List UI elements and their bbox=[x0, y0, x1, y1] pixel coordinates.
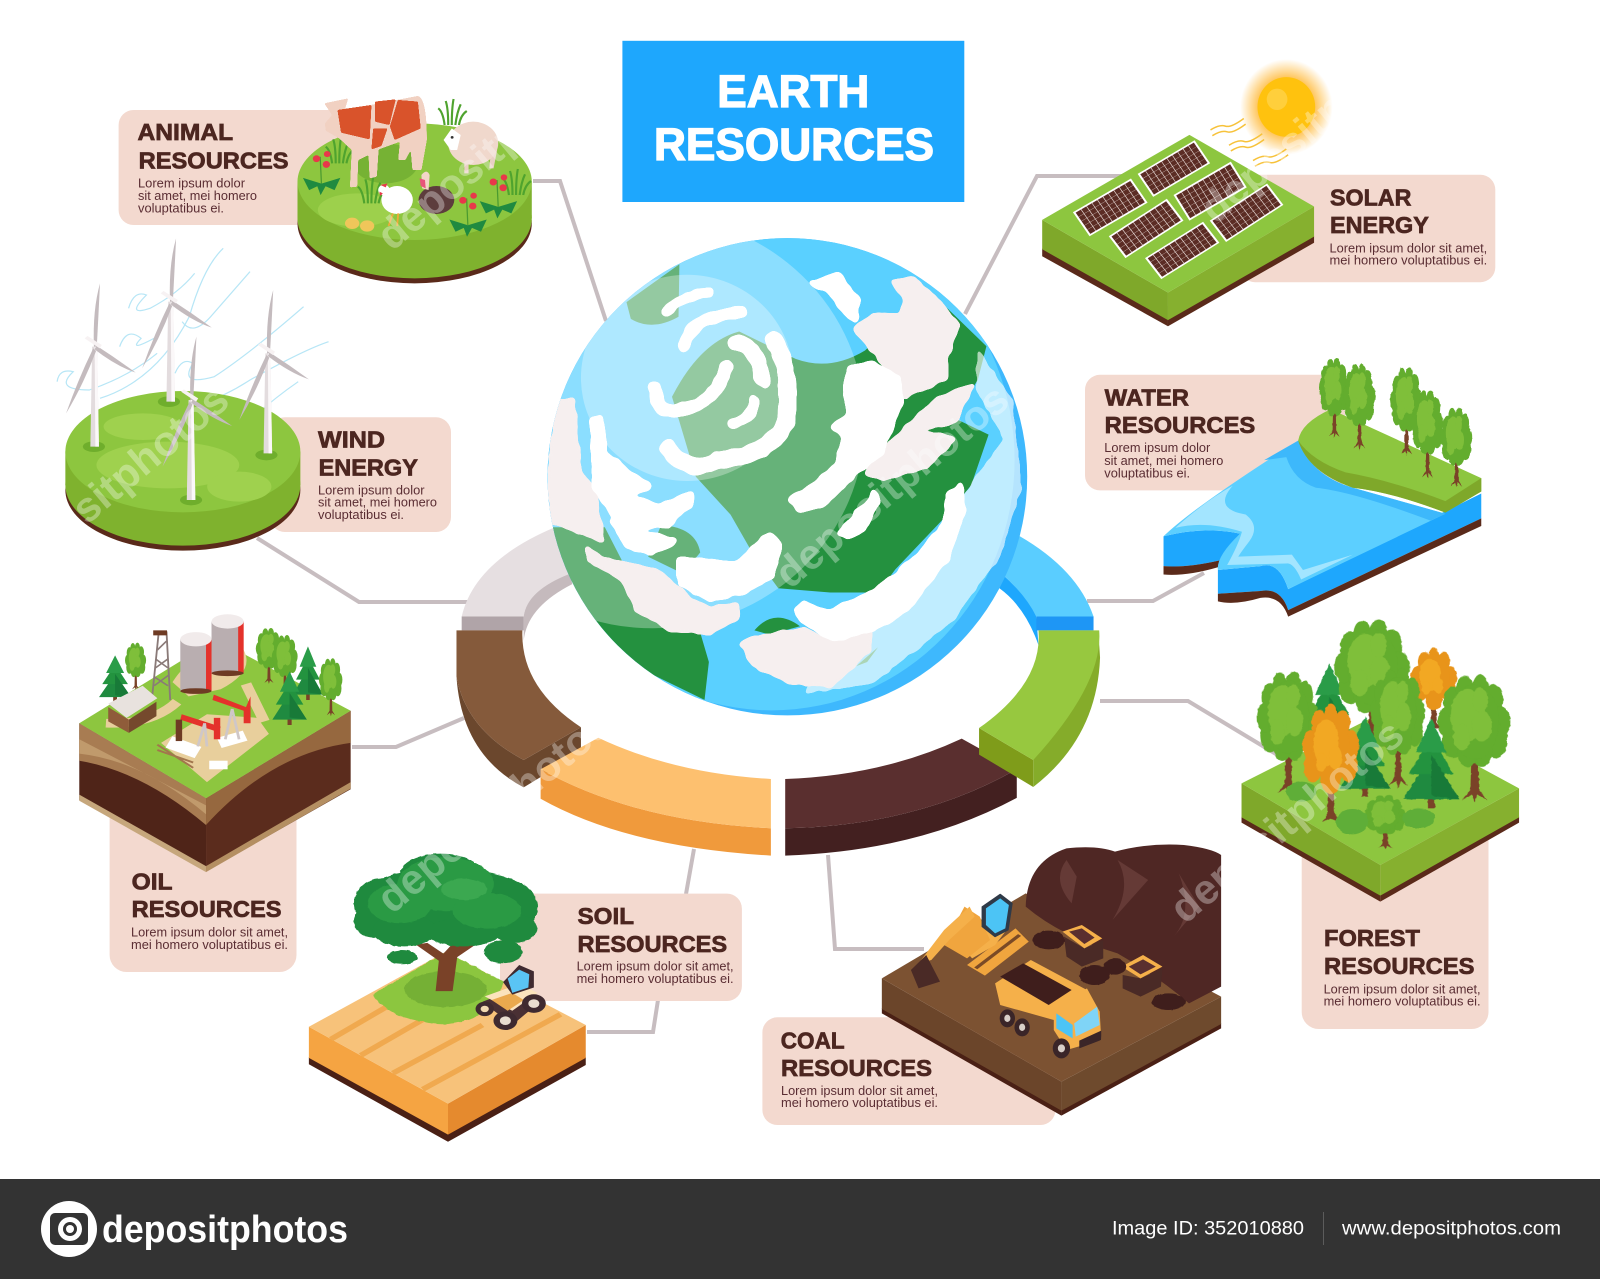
panel: solar energy: ENERGY bbox=[1330, 212, 1429, 238]
panel: wind energy: sit amet, mei homero bbox=[318, 496, 437, 510]
ring segment: oil brown bbox=[456, 630, 581, 787]
illustration: soil field bbox=[309, 854, 586, 1142]
panel: soil resources: mei homero voluptatibus ei. bbox=[577, 972, 734, 986]
panel: water resources: WATER bbox=[1105, 384, 1189, 410]
panel: wind energy: WIND bbox=[318, 426, 385, 452]
sun rays bbox=[1210, 118, 1288, 166]
icon: flowers bbox=[303, 151, 517, 237]
icon: turkey bbox=[419, 172, 454, 214]
panel: coal resources: Lorem ipsum dolor sit amet, bbox=[781, 1084, 938, 1098]
panel: forest resources: Lorem ipsum dolor sit amet, bbox=[1324, 982, 1481, 996]
panel: coal resources bbox=[762, 1017, 1055, 1125]
panel: solar energy bbox=[1240, 175, 1495, 282]
clouds: off-white bbox=[551, 280, 971, 685]
icon: excavator bbox=[911, 894, 1029, 988]
panel: water resources: voluptatibus ei. bbox=[1104, 466, 1190, 480]
ring segment: coal dark brown bbox=[785, 739, 1017, 856]
illustration: oil field bbox=[79, 614, 351, 872]
icon: house bbox=[108, 686, 157, 733]
ring segment: soil orange bbox=[541, 738, 771, 856]
illustration: water bbox=[1164, 358, 1481, 617]
icon: dump truck bbox=[995, 960, 1101, 1058]
panel: forest resources: RESOURCES bbox=[1324, 953, 1474, 979]
panel: water resources: Lorem ipsum dolor bbox=[1104, 441, 1210, 455]
watermarks: depositphotos bbox=[1191, 10, 1442, 232]
icon: trees bbox=[1319, 358, 1472, 488]
panel: wind energy: Lorem ipsum dolor bbox=[318, 483, 424, 497]
solar panels bbox=[1073, 140, 1283, 279]
illustration: forest bbox=[1242, 619, 1519, 902]
watermarks: depositphotos bbox=[766, 375, 1017, 597]
illustration: solar farm bbox=[1042, 59, 1333, 326]
watermarks bbox=[0, 10, 1442, 932]
icon: cow bbox=[324, 96, 427, 187]
icon: hen bbox=[378, 183, 413, 226]
watermarks: depositphotos bbox=[368, 37, 619, 259]
image id: Image ID: 352010880 bbox=[1112, 1218, 1304, 1240]
logo wordmark: depositphotos bbox=[102, 1209, 348, 1251]
panel: wind energy: ENERGY bbox=[319, 454, 418, 480]
panel: solar energy: SOLAR bbox=[1330, 185, 1412, 211]
continents bbox=[544, 264, 989, 700]
icon: bushes bbox=[1286, 782, 1435, 834]
panel: oil resources: Lorem ipsum dolor sit amet, bbox=[131, 925, 288, 939]
coal mountain bbox=[1026, 845, 1221, 1003]
panel: soil resources: RESOURCES bbox=[578, 931, 727, 957]
icon: wind turbine 4 bbox=[239, 290, 309, 453]
icon: chicks bbox=[345, 218, 374, 232]
ring segment: wind grey bbox=[462, 527, 572, 641]
panel: soil resources bbox=[500, 894, 742, 1001]
panel: forest resources: mei homero voluptatibus ei. bbox=[1324, 995, 1481, 1009]
icon: sun bbox=[1240, 59, 1333, 155]
sand paths bbox=[106, 649, 269, 782]
resource ring bbox=[456, 527, 1100, 856]
title box bbox=[622, 41, 964, 202]
panel: soil resources: Lorem ipsum dolor sit amet, bbox=[577, 960, 734, 974]
panel: forest resources: FOREST bbox=[1324, 925, 1420, 951]
panel: animal resources: RESOURCES bbox=[139, 147, 289, 173]
panel: oil resources: OIL bbox=[132, 868, 173, 894]
icon: wind turbine 2 bbox=[142, 238, 212, 402]
panel: oil resources: mei homero voluptatibus ei. bbox=[131, 938, 288, 952]
panel: coal resources: COAL bbox=[781, 1027, 845, 1053]
ring segment: water blue bbox=[999, 536, 1094, 645]
panel: animal resources: Lorem ipsum dolor bbox=[138, 176, 245, 190]
icon: tractor bbox=[476, 965, 546, 1030]
watermarks: depositphotos bbox=[1161, 710, 1412, 932]
globe bbox=[548, 238, 1028, 716]
icon: oil pumps bbox=[166, 695, 251, 769]
panel: coal resources: mei homero voluptatibus ei. bbox=[781, 1096, 938, 1110]
icon: coal carts bbox=[1062, 925, 1162, 997]
panel: animal resources: ANIMAL bbox=[138, 119, 233, 145]
panel: animal resources: voluptatibus ei. bbox=[138, 201, 224, 215]
illustration: coal mine bbox=[882, 845, 1221, 1116]
icon: fence bbox=[157, 745, 193, 768]
pale right cloud band bbox=[804, 348, 1021, 694]
footer bar bbox=[0, 1179, 1600, 1279]
clouds: white bbox=[593, 276, 963, 639]
globe highlights bbox=[548, 240, 858, 628]
title box: RESOURCES bbox=[654, 119, 934, 170]
panel: water resources: RESOURCES bbox=[1105, 412, 1255, 438]
icon: forest trees bbox=[1257, 619, 1510, 849]
icon: camera logo bbox=[41, 1201, 97, 1257]
panel: water resources: sit amet, mei homero bbox=[1104, 454, 1223, 468]
ring segment: forest green bbox=[979, 630, 1100, 787]
illustration: animal platform bbox=[297, 96, 532, 283]
icon: oil tanks bbox=[180, 614, 244, 694]
icon: sheep bbox=[444, 122, 498, 173]
panel: animal resources: sit amet, mei homero bbox=[138, 189, 257, 203]
panel: wind energy: voluptatibus ei. bbox=[318, 508, 404, 522]
watermarks: depositphotos bbox=[368, 700, 619, 922]
icon: wind turbine 3 bbox=[162, 337, 232, 500]
icon: derrick bbox=[152, 630, 170, 700]
panel: solar energy: Lorem ipsum dolor sit amet, bbox=[1330, 241, 1487, 255]
panel: oil resources bbox=[110, 780, 296, 972]
illustration: wind farm bbox=[57, 238, 329, 551]
panel: water resources bbox=[1085, 375, 1345, 490]
connector lines bbox=[257, 176, 1281, 1032]
panel: soil resources: SOIL bbox=[578, 903, 634, 929]
panel: wind energy bbox=[270, 417, 451, 532]
website url: www.depositphotos.com bbox=[1341, 1218, 1561, 1240]
panel: animal resources bbox=[119, 110, 359, 225]
panel: coal resources: RESOURCES bbox=[781, 1055, 932, 1081]
panel: oil resources: RESOURCES bbox=[132, 896, 282, 922]
panel: solar energy: mei homero voluptatibus ei. bbox=[1330, 254, 1487, 268]
icon: tree bbox=[354, 854, 538, 991]
wind swirls bbox=[57, 248, 329, 448]
icon: wind turbine 1 bbox=[66, 283, 136, 447]
field furrows bbox=[331, 1007, 561, 1089]
coal piles bbox=[1032, 931, 1185, 1010]
title box: EARTH bbox=[717, 66, 869, 117]
grass tufts bbox=[326, 99, 531, 203]
icon: trees and pines bbox=[99, 628, 342, 725]
panel: forest resources bbox=[1302, 800, 1488, 1029]
